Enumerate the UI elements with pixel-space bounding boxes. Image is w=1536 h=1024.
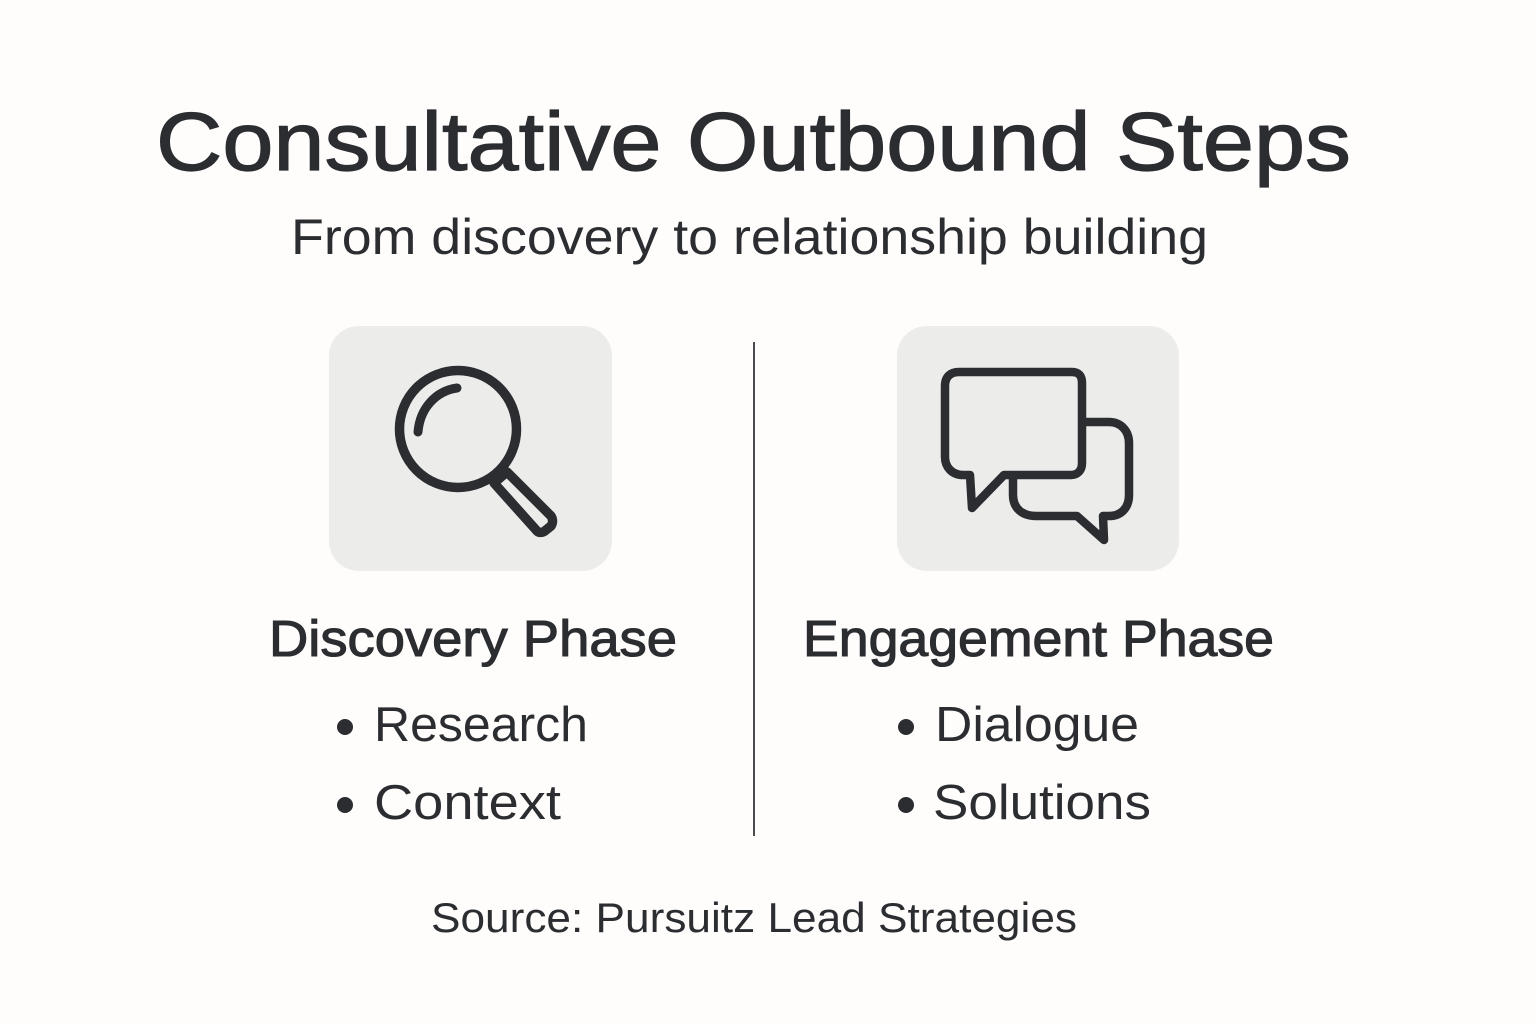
icon tile: magnifying glass: [329, 326, 612, 571]
panel: engagement phase: [803, 326, 1274, 830]
list: engagement items: Solutions: [933, 776, 1151, 830]
list: discovery items: Research: [374, 698, 588, 752]
icon: magnifying glass: [400, 370, 552, 532]
divider: [753, 342, 755, 836]
subtitle: From discovery to relationship building: [291, 209, 1208, 265]
panel: discovery phase: [269, 326, 677, 830]
list: discovery items: Context: [374, 776, 561, 830]
list: engagement items: [898, 698, 1151, 830]
heading: engagement phase: Engagement Phase: [803, 610, 1274, 667]
list: engagement items: Dialogue: [935, 698, 1139, 752]
heading: discovery phase: Discovery Phase: [269, 610, 677, 667]
list: discovery items: [337, 698, 588, 830]
title: Consultative Outbound Steps: [156, 95, 1351, 188]
icon: chat bubbles: [945, 372, 1129, 540]
icon tile: chat bubbles: [897, 326, 1179, 571]
source note: Source: Pursuitz Lead Strategies: [431, 894, 1077, 941]
